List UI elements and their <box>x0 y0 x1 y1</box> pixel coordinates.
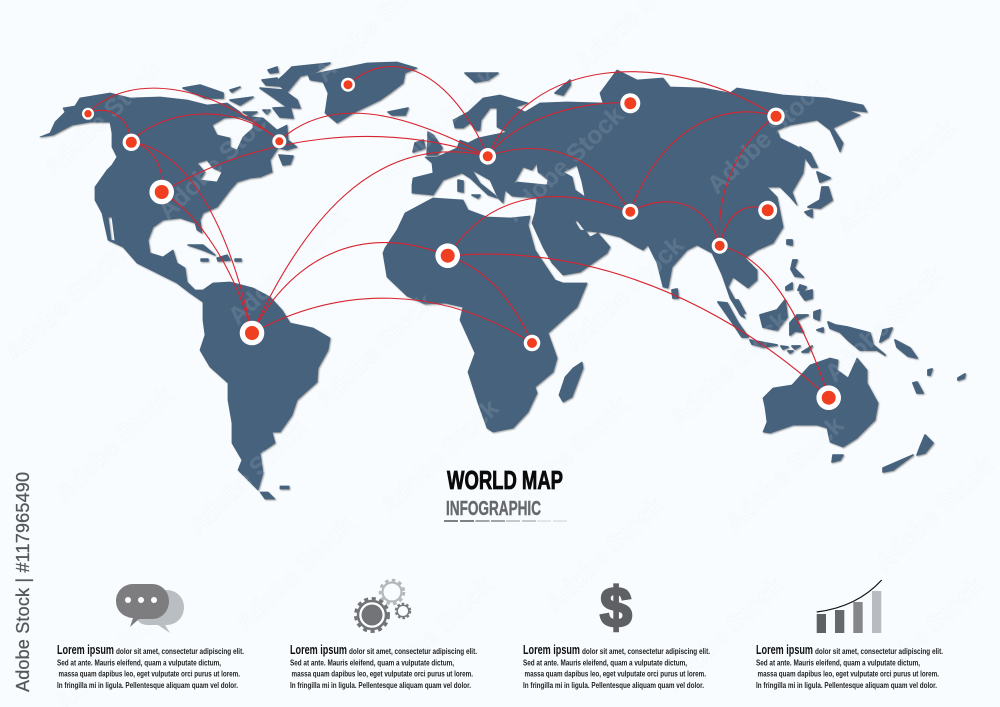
marker: USA <box>149 180 174 204</box>
watermark text: Adobe Stock <box>230 511 359 637</box>
landmass: North and South America <box>40 93 330 490</box>
watermark text: Adobe Stock <box>665 306 794 432</box>
landmass: Australia <box>763 358 878 447</box>
watermark text: Adobe Stock <box>720 411 849 537</box>
indonesian and pacific islands <box>718 300 965 393</box>
text block 2: massa quam dapibus leo, eget vulputate orci purus ut lorem. <box>292 670 473 679</box>
marker: Europe <box>479 148 496 165</box>
watermark text: Adobe Stock <box>38 56 167 182</box>
landmass: Eurasia <box>412 70 867 318</box>
text block 3: dolor sit amet, consectetur adipiscing elit. <box>582 647 710 656</box>
arctic and atlantic islands <box>183 63 570 198</box>
watermark text: Adobe Stock <box>860 571 989 697</box>
marker: Greenland <box>341 78 355 92</box>
text block 1: Sed at ante. Mauris eleifend, quam a vulputate dictum, <box>57 659 221 668</box>
watermark text: Adobe Stock <box>505 391 634 517</box>
text block 4: Lorem ipsum <box>756 643 813 657</box>
connection arcs <box>88 67 829 398</box>
watermark text: Adobe Stock <box>310 288 439 414</box>
text block 3: Sed at ante. Mauris eleifend, quam a vulputate dictum, <box>523 659 687 668</box>
text block 3: massa quam dapibus leo, eget vulputate orci purus ut lorem. <box>524 670 706 679</box>
icon: dollar sign: $ <box>600 576 632 640</box>
text block 4: Sed at ante. Mauris eleifend, quam a vulputate dictum, <box>756 659 920 668</box>
text block 1: Lorem ipsum <box>57 643 114 657</box>
text block 2 <box>290 643 477 690</box>
vertical stock credit: Adobe Stock | #117965490 <box>13 472 33 692</box>
marker: Central Asia <box>622 204 638 220</box>
text block 1: massa quam dapibus leo, eget vulputate orci purus ut lorem. <box>58 670 240 679</box>
icon: gears <box>356 580 410 631</box>
text block 4 <box>756 643 943 690</box>
icon: speech bubbles <box>116 584 184 633</box>
marker: Alaska <box>82 108 94 120</box>
location markers <box>82 78 841 410</box>
text block 4: massa quam dapibus leo, eget vulputate orci purus ut lorem. <box>758 670 939 679</box>
text block 2: Lorem ipsum <box>290 643 347 657</box>
watermark text: Adobe Stock <box>500 101 629 227</box>
watermark text: Adobe Stock <box>375 394 504 520</box>
text block 1: dolor sit amet, consectetur adipiscing elit. <box>116 647 244 656</box>
marker: Russia <box>620 93 640 113</box>
watermark text: Adobe Stock <box>370 571 499 697</box>
marker: Southeast Asia <box>712 238 728 254</box>
text block 1: In fringilla mi in ligula. Pellentesque aliquam quam vel dolor. <box>57 681 238 690</box>
watermark text: Adobe Stock <box>702 73 831 199</box>
marker: South America <box>240 321 264 345</box>
watermark text: Adobe Stock <box>50 381 179 507</box>
world map landmasses <box>40 62 965 499</box>
text block 3: Lorem ipsum <box>523 643 580 657</box>
icon: rising bar chart <box>817 580 882 633</box>
marker: eastern Russia <box>767 108 785 125</box>
marker: Australia <box>816 385 841 410</box>
watermark text: Adobe Stock <box>153 99 282 225</box>
south atlantic islands <box>260 486 289 499</box>
heading: world map: WORLD MAP <box>447 465 563 495</box>
watermark text: Adobe Stock <box>660 571 789 697</box>
text block 2: In fringilla mi in ligula. Pellentesque aliquam quam vel dolor. <box>290 681 471 690</box>
title block <box>444 465 567 521</box>
landmass: Tasmania and New Zealand <box>832 435 933 472</box>
watermark text: Adobe Stock <box>870 451 999 577</box>
caribbean islands <box>188 245 241 261</box>
watermark text: Adobe Stock <box>832 114 961 240</box>
text block 4: In fringilla mi in ligula. Pellentesque aliquam quam vel dolor. <box>756 681 937 690</box>
landmass: Greenland <box>308 62 417 123</box>
landmass: Madagascar <box>559 362 583 402</box>
east asian islands <box>672 147 832 300</box>
text block 2: dolor sit amet, consectetur adipiscing elit. <box>349 647 477 656</box>
watermark text: Adobe Stock <box>560 231 689 357</box>
text block 3 <box>523 643 710 690</box>
marker: eastern Canada <box>272 134 286 148</box>
landmass: Africa <box>383 198 587 432</box>
text block 2: Sed at ante. Mauris eleifend, quam a vulputate dictum, <box>290 659 454 668</box>
subheading: infographic: INFOGRAPHIC <box>446 498 541 520</box>
watermark text: Adobe Stock <box>373 64 502 190</box>
marker: West Africa <box>435 243 460 268</box>
watermark text: Adobe Stock <box>540 491 669 617</box>
watermark text: Adobe Stock <box>820 261 949 387</box>
text block 4: dolor sit amet, consectetur adipiscing elit. <box>815 647 943 656</box>
marker: East Africa <box>524 335 540 351</box>
marker: western Canada <box>123 134 140 151</box>
watermark text: Adobe Stock <box>0 241 129 367</box>
text block 1 <box>57 643 244 690</box>
watermark text: Adobe Stock <box>183 414 312 540</box>
watermark text: Adobe Stock <box>223 204 352 330</box>
text block 3: In fringilla mi in ligula. Pellentesque aliquam quam vel dolor. <box>523 681 704 690</box>
marker: eastern China <box>758 201 777 220</box>
title dashed underline <box>444 520 567 522</box>
